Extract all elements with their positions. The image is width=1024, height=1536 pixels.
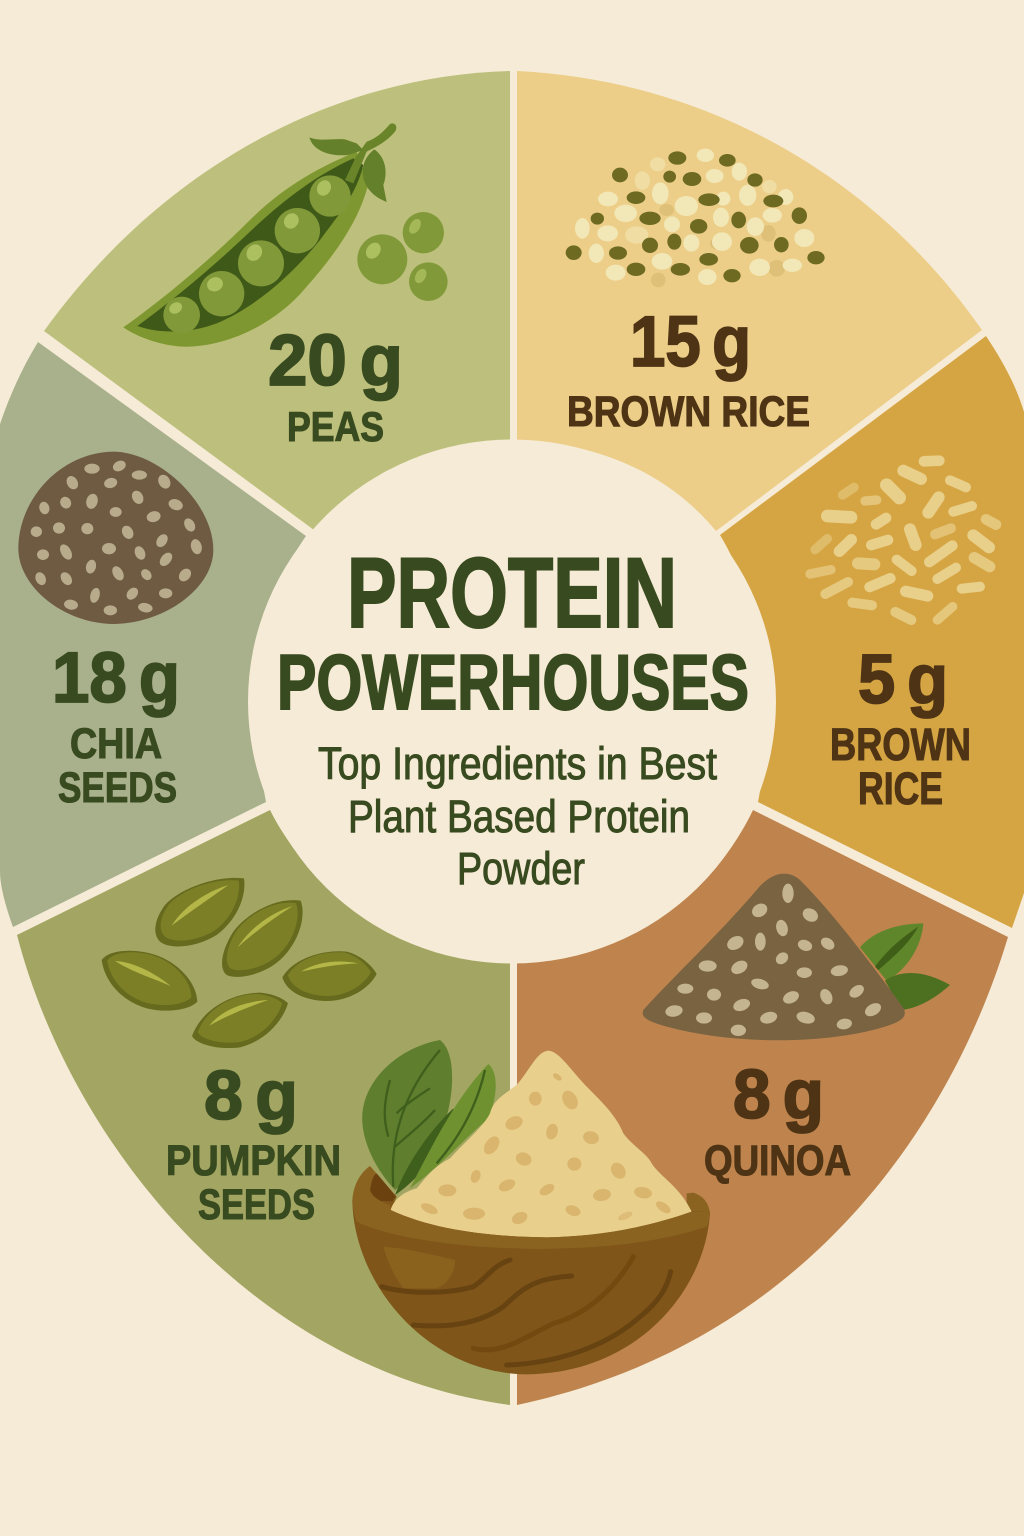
label: chia seeds: CHIA: [70, 720, 162, 768]
icon: wooden bowl of protein powder with leaves: [352, 1040, 710, 1374]
value: 8 g: 8 g: [204, 1056, 298, 1134]
subtitle: Powder: [457, 843, 585, 894]
wood grain: [382, 1247, 671, 1365]
panel: brown rice 5 g: [720, 336, 1024, 928]
title: POWERHOUSES: [277, 638, 749, 726]
panel: chia seeds: SEEDS: [58, 764, 177, 812]
bowl back rim: [352, 1166, 710, 1220]
panel: pumpkin seeds: [17, 810, 510, 1405]
title: PROTEIN: [347, 537, 677, 648]
leaf: small: [395, 1064, 496, 1195]
leaf: large: [362, 1040, 452, 1190]
panel: peas: [44, 71, 510, 530]
label: peas: PEAS: [287, 403, 384, 450]
icon: rice grains: [810, 461, 996, 620]
icon: quinoa pile with leaves: [643, 874, 950, 1040]
label: brown rice: BROWN RICE: [567, 388, 810, 436]
value: 20 g: 20 g: [268, 321, 403, 401]
icon: pea pod: [123, 123, 448, 347]
powder: [391, 1051, 692, 1237]
label: quinoa: QUINOA: [704, 1137, 851, 1185]
panel: pumpkin seeds: SEEDS: [198, 1181, 315, 1229]
center circle: [248, 440, 776, 964]
label: brown rice: BROWN: [830, 719, 971, 770]
label: pumpkin seeds: PUMPKIN: [166, 1137, 341, 1185]
icon: chia seed mound: [18, 452, 213, 624]
value: 5 g: 5 g: [858, 640, 948, 718]
subtitle: Plant Based Protein: [348, 791, 690, 842]
subtitle: Top Ingredients in Best: [318, 738, 717, 789]
value: 18 g: 18 g: [52, 639, 180, 718]
title: [277, 537, 749, 726]
panel: brown rice 15 g: [517, 71, 982, 531]
panel: brown rice 5 g: RICE: [858, 763, 943, 814]
bowl front rim: [352, 1190, 710, 1249]
value: 8 g: 8 g: [733, 1055, 824, 1133]
icon: brown rice mound: [566, 149, 825, 287]
panel: quinoa: [517, 810, 1008, 1405]
panel: chia seeds: [0, 342, 306, 927]
icon: pumpkin seeds: [102, 878, 377, 1048]
value: 15 g: 15 g: [630, 303, 751, 382]
subtitle: [318, 738, 717, 894]
bowl body: [352, 1200, 710, 1374]
